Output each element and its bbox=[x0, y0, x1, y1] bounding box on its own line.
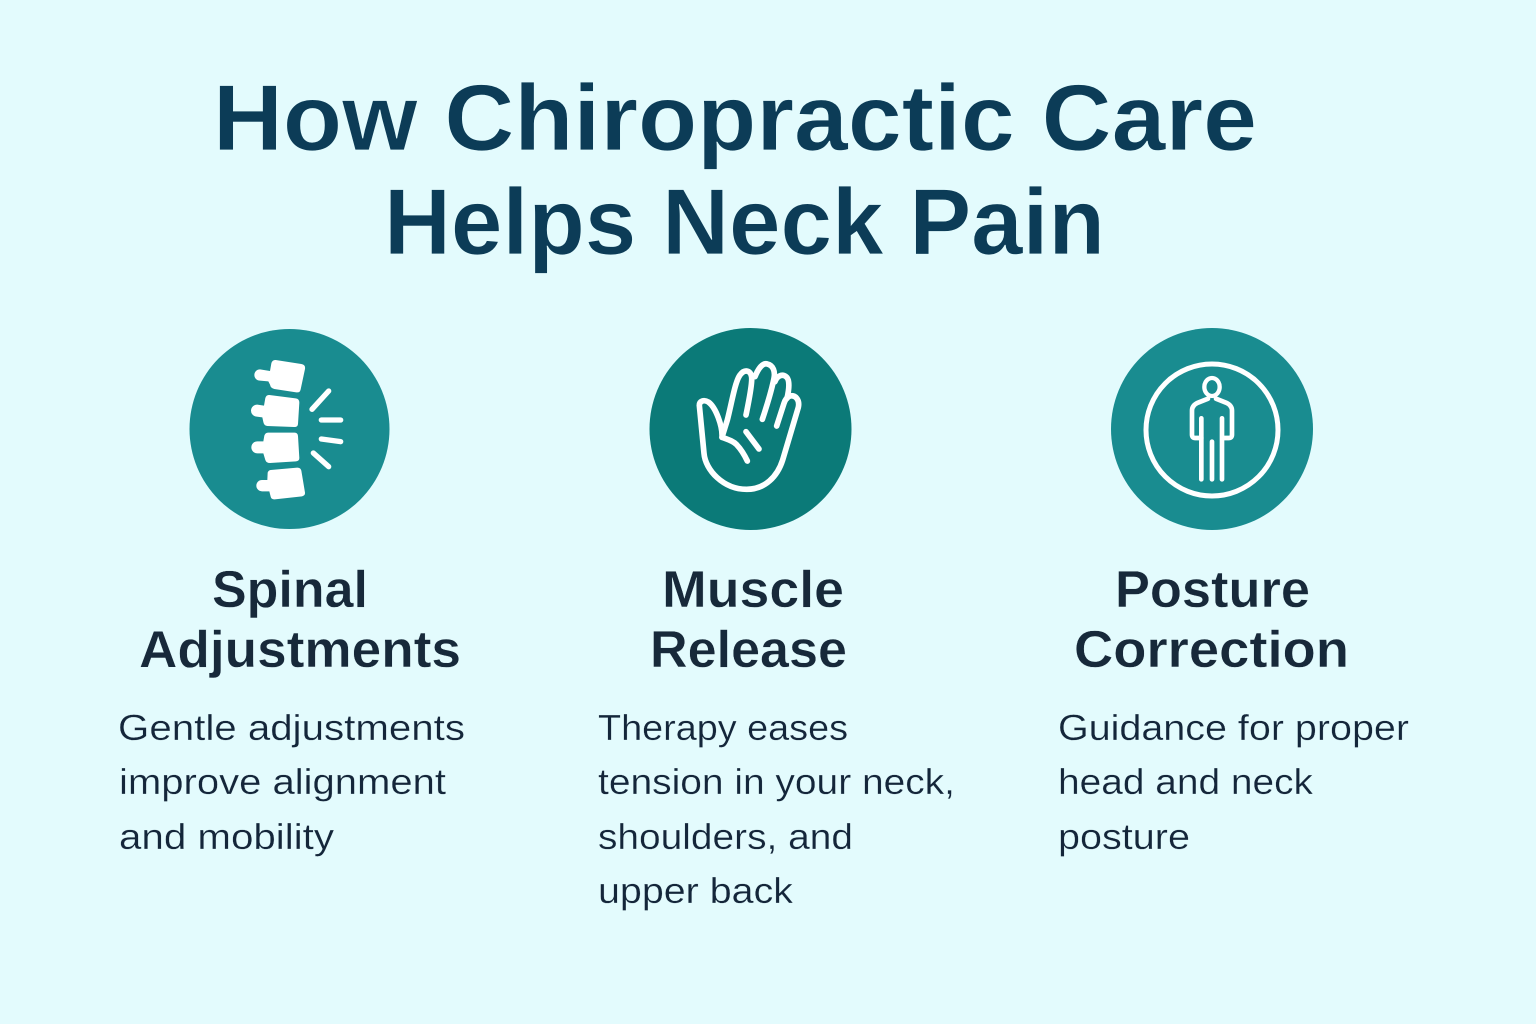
text block: muscle release: tension in your neck, bbox=[598, 761, 955, 802]
heading: muscle release: Release bbox=[650, 621, 847, 679]
text block: spinal adjustments bbox=[118, 707, 465, 857]
heading: posture correction: Posture bbox=[1115, 561, 1310, 619]
text block: muscle release: upper back bbox=[598, 870, 794, 911]
heading: spinal adjustments: Adjustments bbox=[139, 621, 461, 679]
text block: muscle release bbox=[598, 707, 955, 911]
text block: posture correction: head and neck bbox=[1058, 761, 1314, 802]
text block: posture correction: posture bbox=[1058, 816, 1190, 857]
text block: spinal adjustments: improve alignment bbox=[119, 761, 446, 802]
icon: person in circle bbox=[1111, 328, 1313, 530]
heading: posture correction: Correction bbox=[1074, 621, 1349, 679]
text block: posture correction bbox=[1058, 707, 1409, 857]
heading: muscle release bbox=[650, 561, 847, 679]
icon: hand bbox=[650, 328, 852, 530]
text block: muscle release: Therapy eases bbox=[598, 707, 848, 748]
title bbox=[213, 65, 1257, 274]
panel: muscle release bbox=[598, 328, 955, 911]
heading: spinal adjustments bbox=[139, 561, 461, 679]
title: How Chiropractic Care bbox=[213, 65, 1257, 170]
heading: posture correction bbox=[1074, 561, 1349, 679]
text block: spinal adjustments: Gentle adjustments bbox=[118, 707, 465, 748]
title: Helps Neck Pain bbox=[384, 169, 1105, 274]
text block: posture correction: Guidance for proper bbox=[1058, 707, 1409, 748]
text block: spinal adjustments: and mobility bbox=[119, 816, 334, 857]
heading: spinal adjustments: Spinal bbox=[212, 561, 368, 619]
panel: posture correction bbox=[1058, 328, 1409, 857]
panel: spinal adjustments bbox=[118, 329, 465, 857]
icon: spine bbox=[190, 329, 390, 529]
heading: muscle release: Muscle bbox=[662, 561, 844, 619]
text block: muscle release: shoulders, and bbox=[598, 816, 853, 857]
